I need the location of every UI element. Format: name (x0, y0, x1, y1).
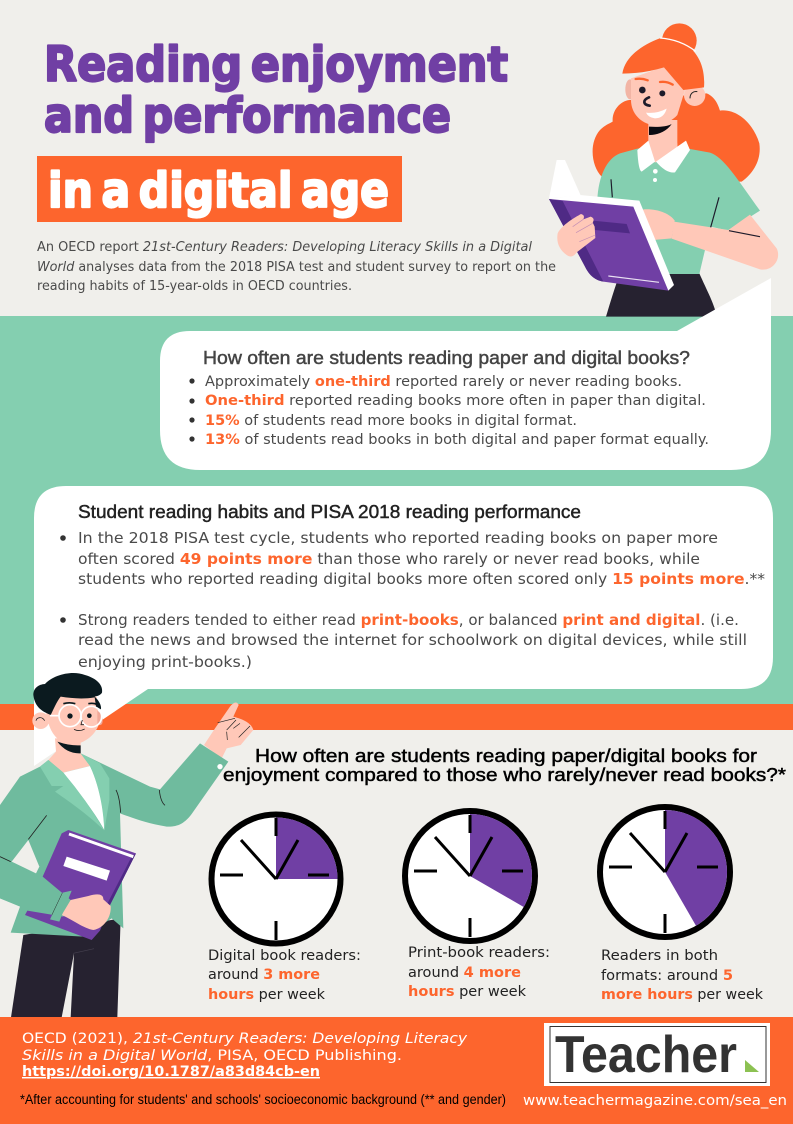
intro text: World analyses data from the 2018 PISA test and student survey to report on the (37, 259, 556, 275)
bullet list: Approximately one-third reported rarely or never reading books. (205, 374, 682, 390)
speech bubble: paper and digital books (160, 278, 771, 470)
question heading (223, 746, 786, 785)
citation: Skills in a Digital World , PISA, OECD Publishing. (22, 1048, 402, 1064)
bullet list: One-third reported reading books more often in paper than digital. (205, 393, 706, 409)
body text: students who reported reading digital books more often scored only 15 points more.** (78, 570, 765, 588)
title: and performance (44, 88, 451, 144)
body text: Strong readers tended to either read print-books, or balanced print and digital. (i.e. (78, 611, 739, 629)
footnote: *After accounting for students' and schools' socioeconomic background (** and gender) (20, 1092, 506, 1107)
citation: OECD (2021), 21st-Century Readers: Developing Literacy (22, 1031, 467, 1047)
caption: digital book readers: around 3 more (208, 967, 320, 983)
illustration: woman reading a book (549, 23, 778, 317)
body text: read the news and browsed the internet for schoolwork on digital devices, while still (78, 631, 747, 649)
caption: readers in both formats (601, 948, 764, 1003)
caption: digital book readers (208, 948, 361, 1003)
citation: https://doi.org/10.1787/a83d84cb-en (22, 1064, 320, 1080)
caption: print-book readers (408, 945, 550, 1000)
website: www.teachermagazine.com/sea_en (523, 1093, 787, 1109)
caption: digital book readers: Digital book readers: (208, 948, 361, 964)
intro text: An OECD report 21st-Century Readers: Developing Literacy Skills in a Digital (37, 239, 532, 255)
question heading: How often are students reading paper/digital books for (255, 746, 757, 766)
clock: print readers 4 hours (405, 811, 535, 941)
subtitle banner: in a digital age (48, 163, 389, 219)
title: Reading enjoyment (44, 37, 508, 93)
title (44, 37, 508, 144)
body text: often scored 49 points more than those who rarely or never read books, while (78, 550, 700, 568)
question heading: enjoyment compared to those who rarely/never read books?* (223, 765, 786, 785)
logo: Teacher: Teacher (555, 1026, 737, 1084)
caption: print-book readers: around 4 more (408, 965, 521, 981)
caption: readers in both formats: Readers in both (601, 948, 718, 964)
bullet list (189, 374, 709, 448)
intro text (37, 239, 556, 294)
caption: print-book readers: Print-book readers: (408, 945, 550, 961)
caption: print-book readers: hours per week (408, 984, 527, 1000)
clock: both formats 5 hours (600, 807, 730, 937)
body text: In the 2018 PISA test cycle, students who reported reading books on paper more (78, 529, 718, 547)
illustration: man pointing with book (0, 673, 253, 1017)
clock: digital readers 3 hours (212, 814, 340, 944)
citation (22, 1031, 467, 1080)
body text: enjoying print-books.) (78, 653, 252, 671)
bullet list: 15% of students read more books in digital format. (205, 413, 577, 429)
caption: readers in both formats: formats: around 5 (601, 968, 733, 984)
caption: digital book readers: hours per week (208, 987, 326, 1003)
caption: readers in both formats: more hours per week (601, 987, 764, 1003)
bullet list: 13% of students read books in both digital and paper format equally. (205, 432, 709, 448)
intro text: reading habits of 15-year-olds in OECD countries. (37, 278, 352, 294)
heading: How often are students reading paper and digital books? (203, 348, 690, 368)
footer (0, 1017, 793, 1124)
speech bubble: reading habits and PISA performance (34, 486, 773, 766)
heading: Student reading habits and PISA 2018 reading performance (78, 502, 581, 522)
body text (60, 529, 765, 671)
